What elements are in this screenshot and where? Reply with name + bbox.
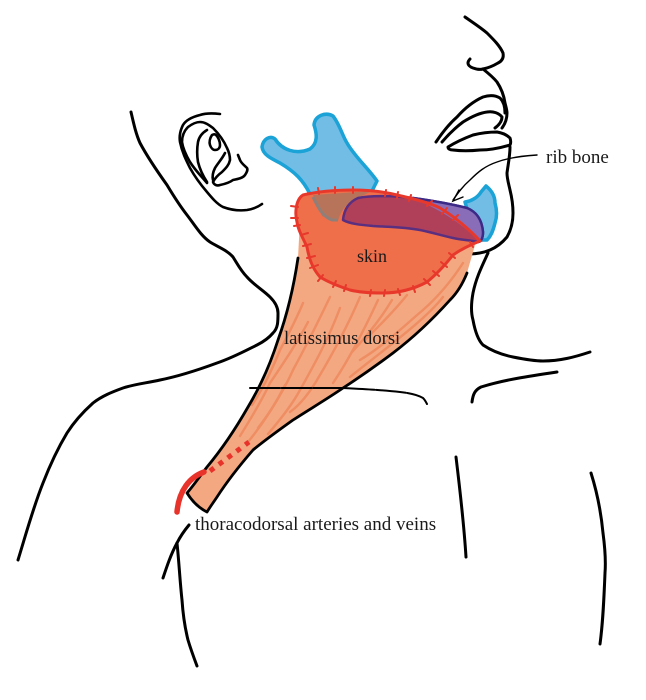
muscle border <box>187 258 467 512</box>
label: thoracodorsal arteries and veins: thoracodorsal arteries and veins <box>195 514 436 535</box>
bone graft: chin fragment <box>465 186 496 240</box>
thoracodorsal vessels <box>177 442 249 512</box>
panel: latissimus dorsi muscle <box>187 220 475 512</box>
label: skin: skin <box>357 246 387 266</box>
overlap: mandible bone under skin <box>313 191 372 221</box>
bone graft: mandible fragment <box>262 114 377 194</box>
nose <box>465 17 503 69</box>
label: latissimus dorsi: latissimus dorsi <box>284 328 400 349</box>
neck and shoulder outline <box>18 112 605 666</box>
philtrum to upper lip <box>483 69 507 128</box>
muscle fibres <box>240 263 463 442</box>
chin and jaw <box>468 147 513 254</box>
overlap: purple plate <box>343 196 483 242</box>
arrow: rib bone pointer <box>453 155 537 201</box>
icon: ear <box>180 113 262 210</box>
dashed line: clavicle over muscle <box>250 388 427 404</box>
mouth <box>448 132 511 151</box>
label: rib bone: rib bone <box>546 147 609 168</box>
suture line around skin paddle <box>291 187 480 296</box>
skin paddle <box>296 190 480 293</box>
face profile <box>436 17 513 254</box>
